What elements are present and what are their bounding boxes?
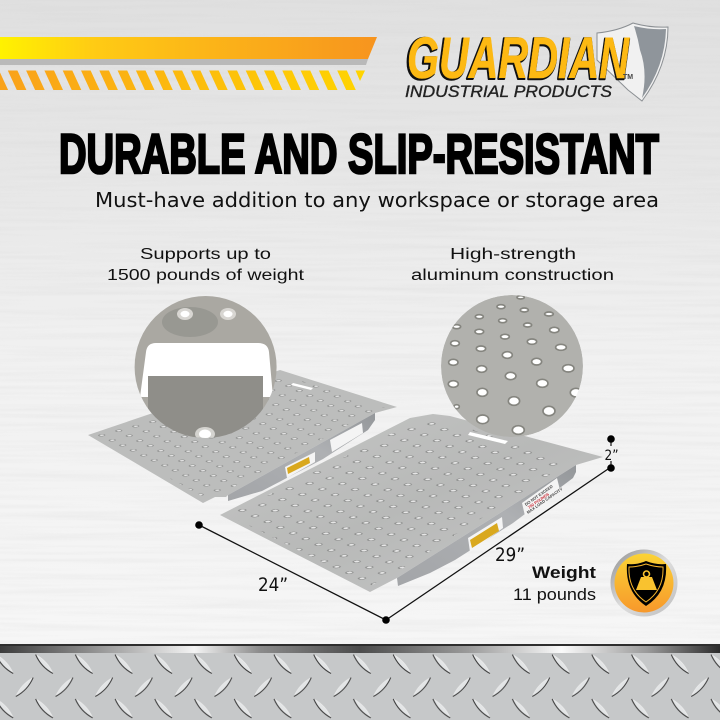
kettlebell weight — [636, 571, 657, 590]
perforation holes — [448, 296, 582, 434]
shield — [627, 561, 666, 606]
front ramp warning label: MAX LOAD CAPACITY — [526, 486, 564, 515]
weight text: Weight — [532, 564, 597, 582]
Guardian logo — [405, 23, 668, 101]
plate base — [0, 653, 720, 720]
back ramp surface — [88, 370, 397, 503]
white cut-out — [140, 343, 273, 397]
logo shield — [597, 23, 668, 101]
back ramp warning label — [330, 423, 363, 452]
24 inch dimension — [195, 521, 386, 620]
grey bar — [0, 59, 368, 65]
GUARDIAN wordmark shadow: GUARDIAN — [406, 27, 629, 92]
header stripes — [0, 37, 377, 90]
front ramp warning label — [522, 478, 564, 516]
plate treads — [0, 653, 720, 720]
weight text — [513, 564, 597, 604]
detail circle: ramp edge underside — [134, 296, 277, 438]
dimension lines — [195, 435, 619, 624]
lower plate — [148, 376, 263, 438]
feature label: aluminum construction: aluminum construction — [411, 267, 614, 284]
front ramp warning label: DO NOT EXCEED — [524, 484, 554, 507]
diamond plate footer — [0, 644, 720, 720]
yellow to orange bar — [0, 37, 377, 59]
Industrial Products: INDUSTRIAL PRODUCTS — [405, 83, 612, 101]
back ramp dot pattern — [92, 374, 385, 498]
2 inch dimension — [604, 435, 619, 472]
subtitle: Must-have addition to any workspace or storage area — [95, 188, 659, 212]
GUARDIAN wordmark: GUARDIAN — [407, 26, 630, 91]
front ramp surface — [220, 414, 603, 592]
icon: weight medallion — [610, 550, 678, 616]
front ramp dot pattern — [228, 420, 570, 586]
bottom hole — [195, 427, 215, 438]
hazard stripes — [0, 70, 365, 90]
29 inch dimension: 29” — [495, 545, 525, 566]
feature label: weight support — [107, 246, 305, 284]
trademark: TM — [623, 74, 633, 81]
worn metal patch — [162, 307, 218, 337]
back ramp side wall — [228, 413, 375, 501]
front ramp yellow label — [468, 517, 503, 552]
detail circle: perforated aluminum — [441, 295, 583, 437]
back ramp — [88, 370, 397, 503]
front ramp — [220, 414, 603, 592]
24 inch dimension: 24” — [258, 575, 288, 596]
feature label: aluminum construction — [411, 246, 614, 284]
feature label: aluminum construction: High-strength — [450, 246, 576, 263]
front ramp slot — [468, 432, 508, 444]
back ramp yellow label — [285, 452, 315, 478]
chrome rail — [0, 646, 720, 654]
back ramp slot — [291, 383, 313, 390]
weight text: 11 pounds — [513, 586, 596, 604]
feature label: weight support: 1500 pounds of weight — [107, 267, 305, 284]
2 inch dimension: 2” — [604, 448, 618, 464]
top holes — [177, 308, 236, 320]
front ramp side wall — [397, 465, 576, 586]
feature label: weight support: Supports up to — [140, 246, 271, 263]
front ramp warning label: 750 POUNDS — [527, 491, 550, 510]
29 inch dimension — [382, 467, 611, 624]
